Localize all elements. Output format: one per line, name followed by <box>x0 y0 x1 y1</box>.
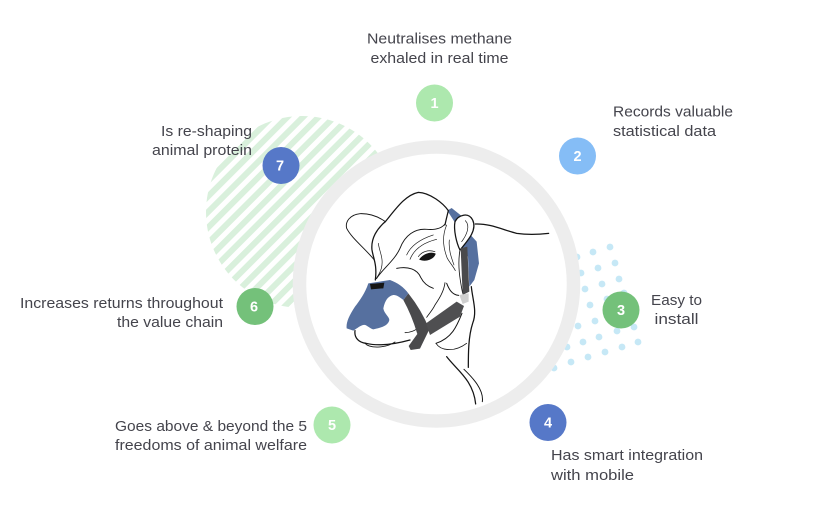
step 7 <box>152 123 300 184</box>
dotted decorative pattern <box>551 244 641 371</box>
dark grey halter straps <box>403 293 429 350</box>
wrinkles <box>407 235 433 255</box>
step 1 <box>367 30 512 122</box>
eye <box>420 253 435 260</box>
step 6: Increases returns throughout <box>20 295 224 312</box>
ear <box>455 215 474 250</box>
step 1: 1 <box>430 96 439 112</box>
step 4 <box>530 404 703 484</box>
muzzle <box>355 331 410 345</box>
step 7: Is re-shaping <box>161 123 252 140</box>
step 4: Has smart integration <box>551 447 703 464</box>
step 5: freedoms of animal welfare <box>115 437 307 454</box>
cow wearing methane mask <box>346 192 549 404</box>
step 3 <box>602 292 702 328</box>
step 5: 5 <box>328 418 336 434</box>
step 2: Records valuable <box>613 104 733 120</box>
step 4: with mobile <box>550 467 634 484</box>
step 3: 3 <box>617 303 625 319</box>
step 2: statistical data <box>613 123 717 140</box>
step 2: 2 <box>573 149 582 165</box>
step 1: Neutralises methane <box>367 30 512 48</box>
step 6: the value chain <box>117 314 223 331</box>
central ring <box>300 147 574 421</box>
neck line <box>475 224 549 234</box>
step 3: install <box>654 311 698 328</box>
step 5: Goes above & beyond the 5 <box>115 418 307 435</box>
step 7: 7 <box>276 158 284 174</box>
striped decorative circle <box>206 116 398 308</box>
step 6 <box>20 288 274 331</box>
head outline <box>346 214 385 260</box>
step 7: animal protein <box>152 142 252 159</box>
step 6: 6 <box>250 300 258 316</box>
step 2 <box>559 104 733 174</box>
blue nose mask <box>347 280 408 331</box>
mask sensor window <box>370 283 384 289</box>
step 5 <box>115 406 350 454</box>
step 4: 4 <box>544 416 552 432</box>
step 3: Easy to <box>651 292 702 309</box>
blue neck strap <box>447 208 479 287</box>
step 1: exhaled in real time <box>370 50 508 67</box>
